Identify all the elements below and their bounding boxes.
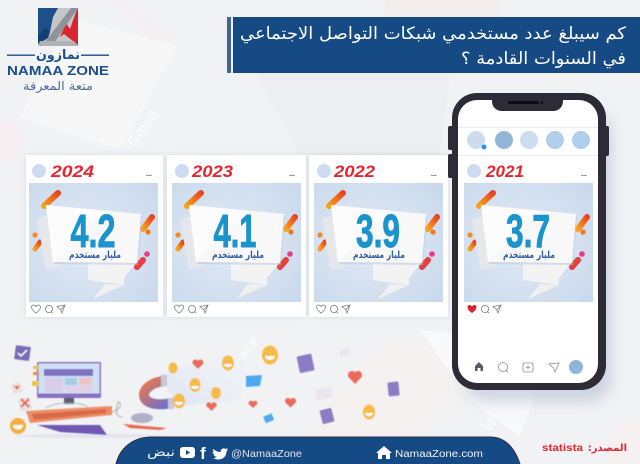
profile cards bbox=[296, 354, 400, 424]
logo tagline: متعة المعرفة bbox=[23, 79, 93, 94]
emoji bbox=[168, 346, 375, 420]
illustration: magnet with social icons bbox=[144, 345, 400, 424]
icon: twitter bbox=[212, 448, 228, 460]
title banner bbox=[227, 17, 640, 73]
card 2023: مليار مستخدم bbox=[212, 250, 264, 261]
card 2024: 2024 bbox=[50, 162, 95, 181]
card 2022: مليار مستخدم bbox=[353, 250, 405, 261]
card 2024: مليار مستخدم bbox=[69, 250, 121, 261]
card 2021 bbox=[464, 162, 593, 313]
card 2023: 2023 bbox=[191, 162, 234, 181]
card 2021: مليار مستخدم bbox=[503, 250, 555, 261]
illustration: computer desk bbox=[10, 345, 167, 438]
card 2024 bbox=[26, 155, 163, 317]
website: NamaaZone.com bbox=[395, 448, 483, 460]
icon: home bbox=[376, 446, 392, 459]
logo latin name: NAMAA ZONE bbox=[7, 63, 109, 78]
source: statista bbox=[542, 442, 583, 454]
phone notch bbox=[492, 98, 563, 111]
phone nav bar bbox=[475, 360, 583, 374]
icon: youtube bbox=[180, 447, 195, 458]
footer label: نبض bbox=[147, 445, 175, 460]
card 2022 bbox=[309, 155, 448, 317]
handle: @NamaaZone bbox=[231, 448, 302, 460]
card 2021: 2021 bbox=[485, 162, 524, 181]
background: Gmail bbox=[124, 107, 163, 150]
hearts bbox=[192, 360, 362, 411]
logo arabic name: نمازون bbox=[36, 48, 80, 63]
card 2021: 3.7 bbox=[506, 205, 550, 257]
title text bbox=[240, 24, 627, 69]
logo bbox=[7, 8, 109, 94]
phone bbox=[448, 93, 612, 402]
card 2022: ... bbox=[431, 171, 437, 178]
envelopes bbox=[314, 348, 351, 401]
source bbox=[542, 442, 627, 454]
background: Whats bbox=[480, 391, 518, 434]
chat bubbles bbox=[246, 375, 274, 423]
background: Face bbox=[228, 333, 262, 370]
icon: facebook: f bbox=[200, 444, 206, 463]
source: المصدر: bbox=[588, 443, 627, 454]
title text: في السنوات القادمة ؟ bbox=[461, 49, 626, 69]
card 2022: 3.9 bbox=[356, 205, 400, 257]
logo icon bbox=[38, 8, 78, 46]
stories row bbox=[467, 131, 590, 150]
card 2023 bbox=[167, 155, 306, 317]
card 2022: 2022 bbox=[333, 162, 376, 181]
title text: كم سيبلغ عدد مستخدمي شبكات التواصل الاجتماعي bbox=[240, 24, 627, 44]
card 2023: 4.1 bbox=[214, 205, 256, 257]
card 2024: ... bbox=[146, 171, 152, 178]
card 2023: ... bbox=[289, 171, 295, 178]
card 2021: ... bbox=[581, 171, 587, 178]
footer bar bbox=[116, 437, 520, 464]
card 2024: 4.2 bbox=[70, 205, 116, 257]
